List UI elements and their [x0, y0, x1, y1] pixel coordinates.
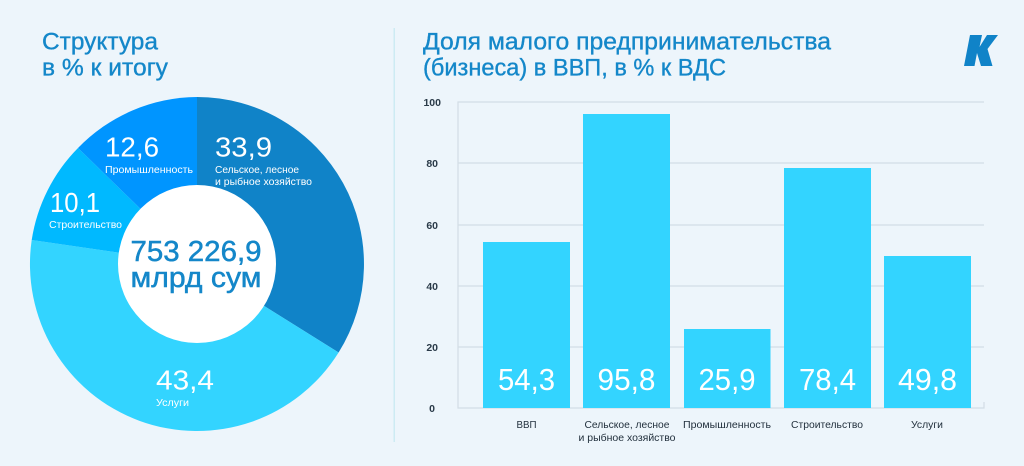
title: share of small business: (бизнеса) в ВВП, в % к ВДС — [423, 54, 726, 82]
y axis labels: 60 — [426, 220, 438, 232]
label: construction: Строительство — [49, 220, 122, 231]
grid lines — [458, 102, 984, 408]
donut chart — [30, 97, 364, 431]
label: services — [156, 364, 214, 409]
segment: agriculture 33.9 — [197, 97, 364, 352]
label: industry: Промышленность — [105, 165, 193, 176]
bar: GDP 54.3: 54,3 — [498, 362, 555, 397]
divider — [394, 28, 395, 442]
y axis labels: 0 — [429, 403, 435, 415]
bar chart — [423, 97, 984, 444]
title: structure: в % к итогу — [42, 54, 169, 82]
x axis labels: Сельское, лесное — [584, 420, 670, 431]
centre total: 753 226,9 — [130, 236, 262, 268]
title: share of small business: Доля малого предпринимательства — [423, 28, 831, 56]
bar: GDP 54.3 — [483, 242, 570, 408]
label: construction: 10,1 — [50, 187, 100, 218]
label: services: Услуги — [156, 398, 189, 409]
x axis labels: Строительство — [791, 420, 863, 431]
segment: industry 12.6 — [78, 97, 197, 264]
label: agriculture: и рыбное хозяйство — [215, 176, 312, 188]
bar: agriculture 95.8: 95,8 — [598, 362, 656, 397]
label: construction — [49, 187, 122, 231]
bar: industry 25.9: 25,9 — [698, 362, 756, 397]
y axis labels: 100 — [423, 97, 441, 109]
x axis labels — [516, 420, 943, 444]
y axis labels — [423, 97, 441, 415]
donut hole — [118, 185, 276, 343]
label: industry — [105, 132, 193, 176]
y axis labels: 20 — [426, 342, 438, 354]
bar: industry 25.9 — [684, 329, 770, 408]
bar: agriculture 95.8 — [583, 114, 670, 408]
label: agriculture: 33,9 — [215, 132, 272, 162]
x axis labels: Услуги — [911, 420, 943, 431]
bar: construction 78.4: 78,4 — [799, 362, 856, 397]
y axis labels: 40 — [426, 281, 438, 293]
label: agriculture: Сельское, лесное — [215, 165, 299, 176]
title: structure — [42, 28, 169, 82]
bar: services 49.8 — [884, 256, 971, 408]
segment: services 43.4 — [30, 240, 339, 431]
centre total — [130, 236, 262, 294]
icon: K logo — [964, 35, 998, 66]
label: industry: 12,6 — [105, 132, 159, 162]
y axis labels: 80 — [426, 158, 438, 170]
label: agriculture — [215, 132, 312, 188]
x axis labels: Промышленность — [683, 420, 771, 431]
title: share of small business — [423, 28, 831, 82]
label: services: 43,4 — [156, 364, 214, 396]
bar: services 49.8: 49,8 — [898, 362, 957, 397]
title: structure: Структура — [42, 28, 158, 56]
x axis labels: ВВП — [516, 420, 536, 431]
x axis labels: и рыбное хозяйство — [578, 432, 676, 444]
bar: construction 78.4 — [784, 168, 871, 408]
segment: construction 10.1 — [32, 148, 197, 264]
centre total: млрд сум — [130, 262, 262, 294]
